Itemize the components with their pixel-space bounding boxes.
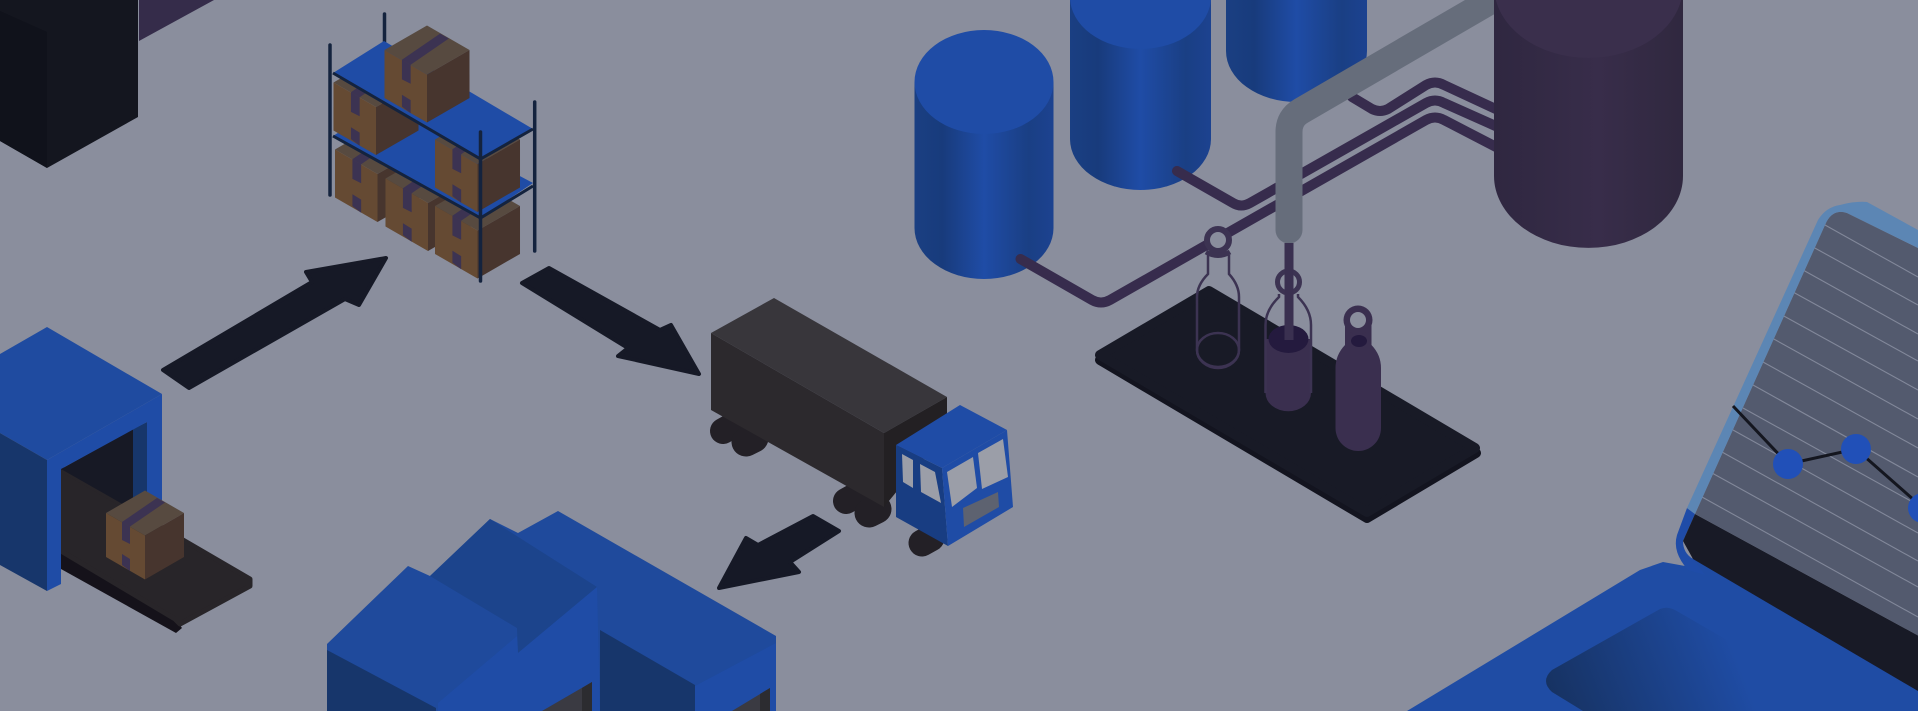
entrance front frame <box>47 394 162 591</box>
arrow to shelf <box>163 258 386 388</box>
delivery truck <box>711 298 1013 546</box>
opening interior <box>61 429 133 510</box>
laptop base <box>1407 556 1918 711</box>
blue storage tanks <box>914 0 1367 279</box>
grille <box>963 492 999 527</box>
distribution building <box>327 511 776 711</box>
lower shelf <box>333 104 533 218</box>
purple storage tank <box>1494 0 1683 248</box>
keyboard hinge bar <box>1683 514 1918 691</box>
filling nozzle <box>1284 243 1294 340</box>
loading doors <box>542 682 770 711</box>
trackpad <box>1546 608 1850 711</box>
tank two <box>1070 0 1211 190</box>
tank one <box>914 30 1054 279</box>
laptop dashboard <box>1407 202 1918 711</box>
bottle being filled <box>1266 243 1311 411</box>
arrow to truck <box>522 268 699 374</box>
grey filling pipe <box>1289 0 1540 230</box>
purple feed pipes <box>1020 82 1500 302</box>
cab <box>896 405 1013 546</box>
arrow to distribution building <box>719 516 839 588</box>
screen <box>1695 212 1918 635</box>
filling table <box>1100 291 1476 518</box>
floor boxes <box>335 125 520 278</box>
entrance side wall <box>0 433 47 591</box>
empty bottle <box>1197 229 1239 368</box>
conveyor belt <box>61 469 250 633</box>
black cube building, top left <box>0 0 214 168</box>
tank three <box>1226 0 1367 102</box>
warehouse shelf with boxes <box>330 14 535 281</box>
line chart <box>1733 406 1918 523</box>
upper shelf <box>333 41 533 159</box>
lower screen rim <box>1676 508 1705 575</box>
screen bezel <box>1687 202 1918 514</box>
middle boxes <box>333 58 520 212</box>
filled bottle <box>1336 306 1381 451</box>
rear wheels <box>723 426 877 513</box>
box on conveyor <box>106 490 184 580</box>
trailer <box>711 298 947 507</box>
screen grid lines <box>1702 225 1918 617</box>
factory entrance with conveyor <box>0 327 250 633</box>
top box <box>384 25 470 122</box>
front wheel <box>922 538 931 543</box>
entrance roof <box>0 327 162 460</box>
windows <box>902 439 1008 507</box>
